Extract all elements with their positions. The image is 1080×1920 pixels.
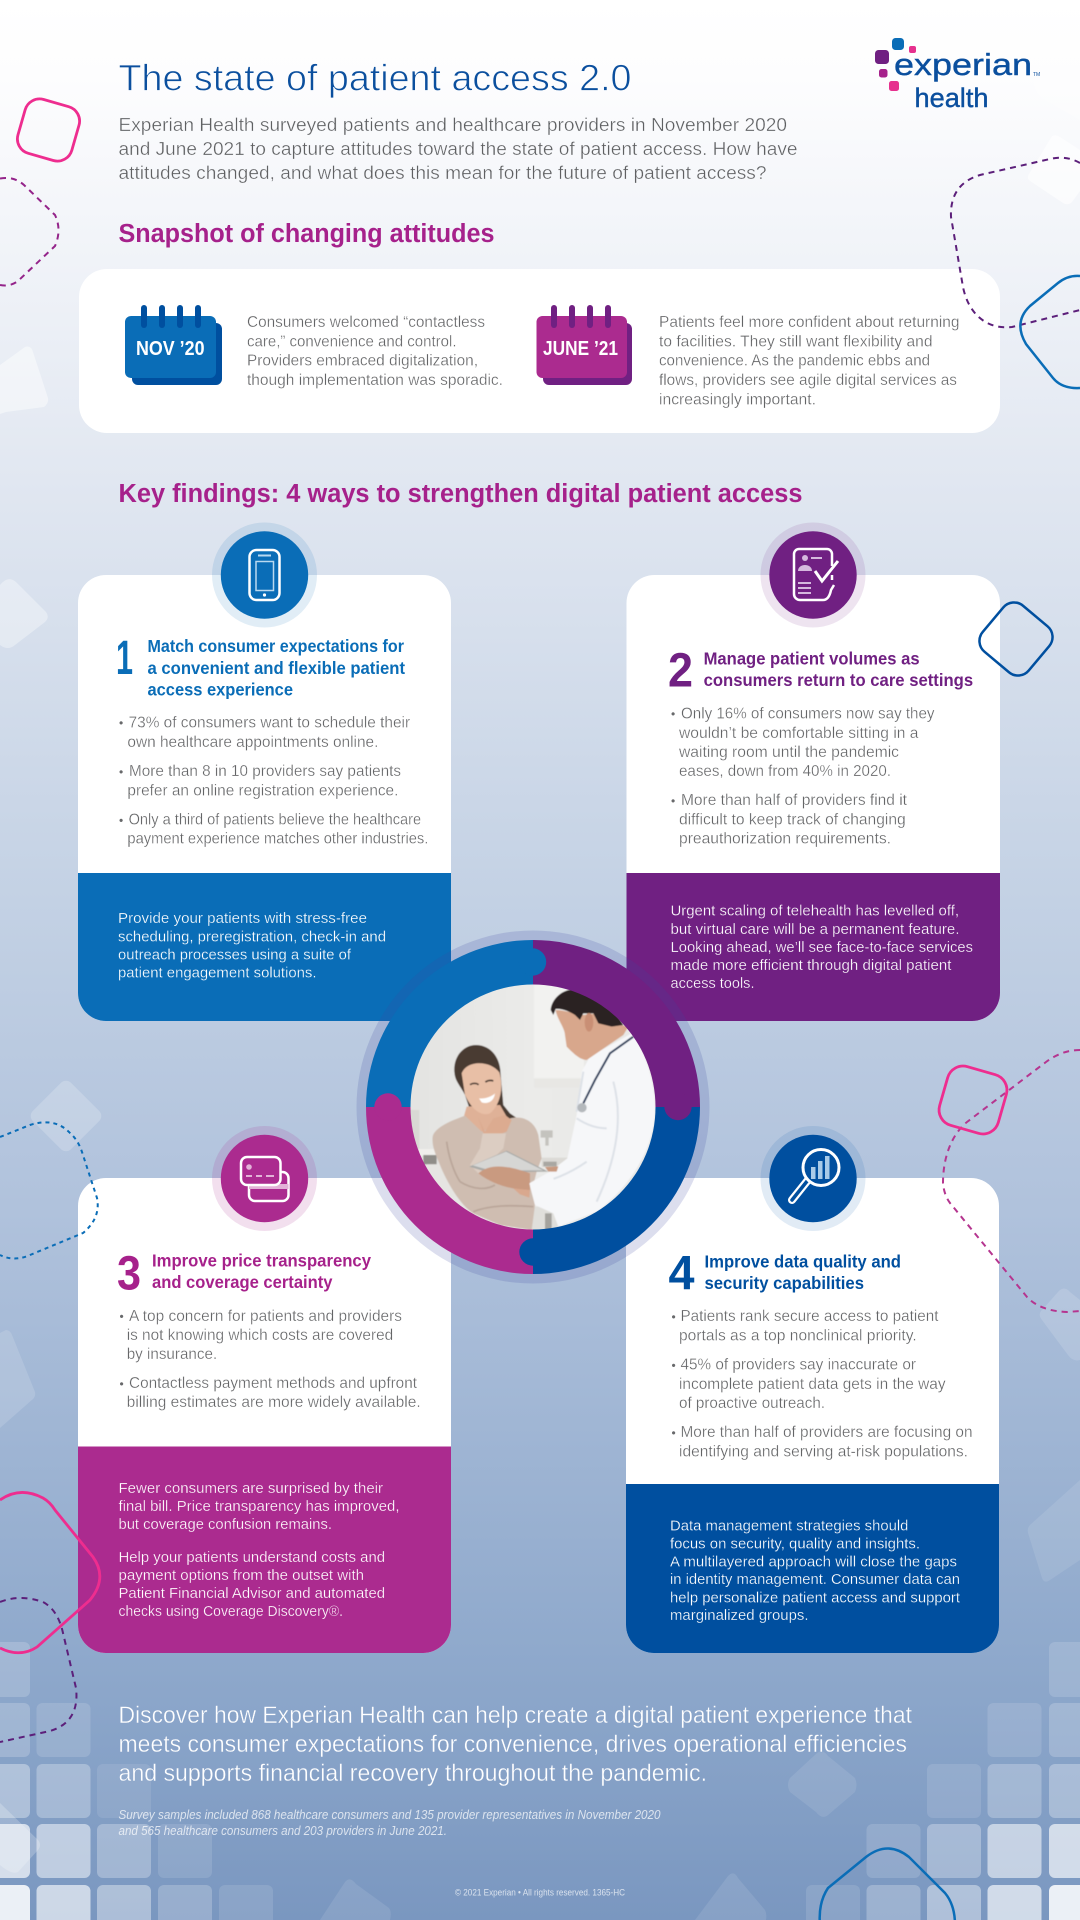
card 4 bullets: identifying and serving at-risk populations. <box>679 1443 968 1460</box>
card 1 bullets: own healthcare appointments online. <box>127 734 378 751</box>
card 2 bullets: More than half of providers find it <box>681 792 908 809</box>
card 2 bullets: eases, down from 40% in 2020. <box>679 763 891 780</box>
card 3 recommendation: but coverage confusion remains. <box>118 1516 332 1533</box>
card 3: price transparency <box>78 1126 451 1653</box>
card 3 recommendation: Help your patients understand costs and <box>118 1549 385 1566</box>
decorative outline: pink rounded square top left <box>14 95 83 165</box>
text: Nov 2020 attitudes <box>247 314 503 389</box>
card 1 bullets: prefer an online registration experience. <box>127 782 398 800</box>
closing statement <box>118 1702 912 1787</box>
survey footnote <box>118 1808 661 1838</box>
text: June 2021 attitudes: increasingly important. <box>659 392 816 408</box>
card 3 recommendation <box>118 1480 400 1620</box>
card 4 recommendation: help personalize patient access and support <box>670 1589 961 1606</box>
card 2 heading: Manage patient volumes as <box>704 649 920 669</box>
heading: key findings: Key findings: 4 ways to strengthen digital patient access <box>118 480 802 508</box>
doctor's hair <box>551 989 623 1027</box>
decorative tile grid: bottom right <box>806 1642 1080 1920</box>
decorative outline: pink large left <box>0 1492 100 1653</box>
card 2 bullets: • <box>671 707 675 721</box>
woman's lower hand <box>513 1188 530 1198</box>
card 2 recommendation: Urgent scaling of telehealth has levelled off, <box>670 903 959 920</box>
card 4 recommendation <box>670 1518 961 1624</box>
coat shading <box>554 1072 619 1202</box>
logo: experian health: experian <box>894 47 1032 82</box>
card 4 recommendation: A multilayered approach will close the gaps <box>670 1553 957 1570</box>
card 4: data quality <box>626 1126 999 1653</box>
decorative outline: blue bottom right <box>820 1848 955 1920</box>
card 2 recommendation: access tools. <box>670 975 754 992</box>
decorative outline: dashed blue left <box>0 1122 98 1258</box>
card 1 recommendation <box>118 910 386 981</box>
card 4 recommendation: in identity management. Consumer data can <box>670 1571 960 1588</box>
doctor's hand on tablet <box>478 1166 530 1190</box>
logo: experian health: health <box>914 83 988 113</box>
card 3 heading <box>152 1251 371 1292</box>
card 3 recommendation: Fewer consumers are surprised by their <box>118 1480 383 1497</box>
card 1 bullets: payment experience matches other industries. <box>127 831 428 848</box>
card 2 bullets: • <box>671 794 675 808</box>
doctor's face <box>556 1010 628 1060</box>
intro paragraph <box>118 115 798 183</box>
card 4 band <box>626 1484 999 1653</box>
card 3 heading: Improve price transparency <box>152 1251 371 1271</box>
copyright: © 2021 Experian • All rights reserved. 1365-HC <box>455 1888 625 1898</box>
icon: magnifier with bars <box>760 1126 866 1231</box>
card 2 recommendation: but virtual care will be a permanent feature. <box>670 921 960 938</box>
card 1 bullets: More than 8 in 10 providers say patients <box>129 763 401 780</box>
card 1 bullets: • <box>119 716 123 730</box>
card 4 heading: security capabilities <box>704 1273 864 1293</box>
decorative outline: dashed pink right <box>943 1050 1080 1312</box>
card 4 bullets: More than half of providers are focusing on <box>680 1424 972 1441</box>
card 4 bullets <box>672 1308 972 1460</box>
woman's face <box>462 1063 501 1114</box>
woman's sweater <box>432 1116 542 1230</box>
number 2: 2 <box>668 644 693 698</box>
doctor's coat <box>529 1033 655 1227</box>
text: June 2021 attitudes: to facilities. They still want flexibility and <box>659 333 932 350</box>
card 3 bullets: billing estimates are more widely available. <box>127 1394 421 1411</box>
card 1 recommendation: scheduling, preregistration, check-in and <box>118 928 386 946</box>
survey footnote: Survey samples included 868 healthcare consumers and 135 provider representatives in November 2020 <box>118 1808 661 1822</box>
card 4 bullets: • <box>672 1310 676 1324</box>
card 4 bullets: • <box>672 1358 676 1372</box>
intro paragraph: and June 2021 to capture attitudes toward the state of patient access. How have <box>118 139 798 159</box>
card 4 bullets: incomplete patient data gets in the way <box>679 1376 946 1393</box>
woman's hand at neck <box>482 1116 512 1134</box>
card 4 bullets: of proactive outreach. <box>679 1395 825 1412</box>
fingers at tablet edge <box>545 1166 558 1172</box>
card 1 heading: access experience <box>148 680 293 700</box>
panel: snapshot <box>79 269 1000 433</box>
card 2 band <box>626 873 1000 1021</box>
card 3 bullets <box>120 1308 421 1411</box>
card 3 bullets: Contactless payment methods and upfront <box>129 1375 418 1392</box>
number 1: 1 <box>116 632 133 685</box>
number 4: 4 <box>668 1248 695 1300</box>
card 1 heading: Match consumer expectations for <box>148 636 404 656</box>
card 4 recommendation: Data management strategies should <box>670 1518 908 1534</box>
card 1 bullets: Only a third of patients believe the healthcare <box>129 812 421 829</box>
text: June 2021 attitudes: convenience. As the pandemic ebbs and <box>659 353 930 370</box>
survey footnote: and 565 healthcare consumers and 203 providers in June 2021. <box>118 1824 447 1838</box>
card 3 heading: and coverage certainty <box>152 1272 333 1292</box>
card 2 heading: consumers return to care settings <box>704 670 973 690</box>
stethoscope <box>583 1037 633 1103</box>
icon: calendar June '21 <box>536 308 632 385</box>
card 1 bullets: • <box>119 814 123 828</box>
text: June 2021 attitudes: Patients feel more confident about returning <box>659 314 960 331</box>
icon: calendar June '21: JUNE ’21 <box>543 338 618 360</box>
tablet <box>469 1151 548 1172</box>
tablet face <box>473 1152 543 1170</box>
card 3 bullets: • <box>120 1310 124 1324</box>
icon: document with check <box>760 522 866 628</box>
decorative outline: blue right <box>1020 276 1080 388</box>
card 4 bullets: Patients rank secure access to patient <box>680 1308 939 1325</box>
card 4 recommendation: marginalized groups. <box>670 1607 808 1624</box>
heading: snapshot of changing attitudes: Snapshot of changing attitudes <box>118 220 494 248</box>
card 3 bullets: by insurance. <box>127 1346 217 1363</box>
card 1 recommendation: outreach processes using a suite of <box>118 946 352 963</box>
logo: experian health: TM <box>1033 72 1040 78</box>
card 1 bullets: 73% of consumers want to schedule their <box>129 715 410 732</box>
card 2 bullets: Only 16% of consumers now say they <box>681 706 935 723</box>
decorative outline: navy rounded square by card 2 <box>974 597 1058 681</box>
card 1 heading: a convenient and flexible patient <box>148 658 405 678</box>
closing statement: Discover how Experian Health can help create a digital patient experience that <box>118 1702 912 1729</box>
logo: experian health <box>875 38 1040 113</box>
intro paragraph: attitudes changed, and what does this mean for the future of patient access? <box>118 163 766 183</box>
card 1 band <box>78 873 451 1021</box>
card 1 recommendation: Provide your patients with stress-free <box>118 910 367 927</box>
card 3 recommendation: payment options from the outset with <box>118 1567 364 1584</box>
card 4 recommendation: focus on security, quality and insights. <box>670 1535 920 1552</box>
card 1 heading <box>148 636 405 700</box>
title: The state of patient access 2.0 <box>118 56 632 98</box>
card 3 bullets: A top concern for patients and providers <box>129 1308 402 1325</box>
icon: calendar Nov '20: NOV ’20 <box>136 338 204 360</box>
card 2 bullets: waiting room until the pandemic <box>678 744 899 761</box>
stethoscope head <box>577 1103 587 1112</box>
card 1 bullets <box>119 715 428 848</box>
decorative outline: pink rounded square right <box>935 1062 1011 1138</box>
card 2 recommendation: Looking ahead, we’ll see face-to-face services <box>670 939 973 956</box>
card 2 bullets: preauthorization requirements. <box>679 831 891 848</box>
card 3 bullets: is not knowing which costs are covered <box>127 1327 393 1344</box>
card 2: patient volumes <box>626 522 1000 1021</box>
text: Nov 2020 attitudes: though implementation was sporadic. <box>247 372 503 389</box>
card 2 recommendation: made more efficient through digital patient <box>670 957 952 974</box>
woman's smile <box>479 1093 495 1103</box>
card 2 bullets: difficult to keep track of changing <box>679 812 906 829</box>
card 4 bullets: 45% of providers say inaccurate or <box>680 1357 916 1374</box>
card 4 heading <box>704 1251 901 1293</box>
text: June 2021 attitudes <box>659 314 960 408</box>
intro paragraph: Experian Health surveyed patients and healthcare providers in November 2020 <box>118 115 787 135</box>
card 4 bullets: • <box>672 1426 676 1440</box>
decorative outline: dashed purple lower left <box>0 1598 76 1742</box>
card 2 bullets: wouldn’t be comfortable sitting in a <box>678 725 919 742</box>
closing statement: meets consumer expectations for convenience, drives operational efficiencies <box>118 1731 907 1758</box>
card 2 bullets <box>671 706 935 848</box>
card 1 recommendation: patient engagement solutions. <box>118 964 316 981</box>
ring: four-piece puzzle around photo <box>356 930 710 1284</box>
decorative outline: dashed magenta left <box>0 178 58 286</box>
decorative outline: dashed purple top right <box>951 158 1080 327</box>
card 2 heading <box>704 649 973 690</box>
icon: smartphone <box>212 522 317 628</box>
number 3: 3 <box>117 1248 141 1300</box>
woman's sleeve <box>470 1133 506 1175</box>
card 1 bullets: • <box>119 765 123 779</box>
card 3 bullets: • <box>120 1377 124 1391</box>
text: June 2021 attitudes: flows, providers see agile digital services as <box>659 372 957 389</box>
card 4 heading: Improve data quality and <box>704 1251 901 1271</box>
card 3 band <box>78 1446 451 1653</box>
text: Nov 2020 attitudes: Providers embraced digitalization, <box>247 353 478 370</box>
doctor's cuff <box>528 1178 554 1186</box>
closing statement: and supports financial recovery throughout the pandemic. <box>118 1760 707 1787</box>
doctor's ear <box>585 1013 593 1032</box>
photo: doctor showing tablet to smiling patient <box>407 982 660 1235</box>
text: Nov 2020 attitudes: Consumers welcomed “contactless <box>247 314 485 331</box>
card 1: consumer expectations <box>78 522 451 1021</box>
icon: payment cards <box>212 1126 317 1231</box>
card 2 recommendation <box>670 903 973 992</box>
woman's neck and chest <box>463 1105 507 1133</box>
card 3 recommendation: final bill. Price transparency has improved, <box>118 1498 400 1515</box>
text: Nov 2020 attitudes: care,” convenience and control. <box>247 333 456 350</box>
decorative tile grid: bottom left <box>0 1642 273 1920</box>
woman's eyes <box>470 1080 493 1085</box>
card 4 bullets: portals as a top nonclinical priority. <box>679 1327 917 1344</box>
card 3 recommendation: Patient Financial Advisor and automated <box>118 1585 385 1602</box>
icon: calendar Nov '20 <box>125 308 222 385</box>
woman's hair <box>454 1045 517 1125</box>
card 3 recommendation: checks using Coverage Discovery®. <box>118 1603 343 1620</box>
sweater folds <box>447 1142 533 1212</box>
